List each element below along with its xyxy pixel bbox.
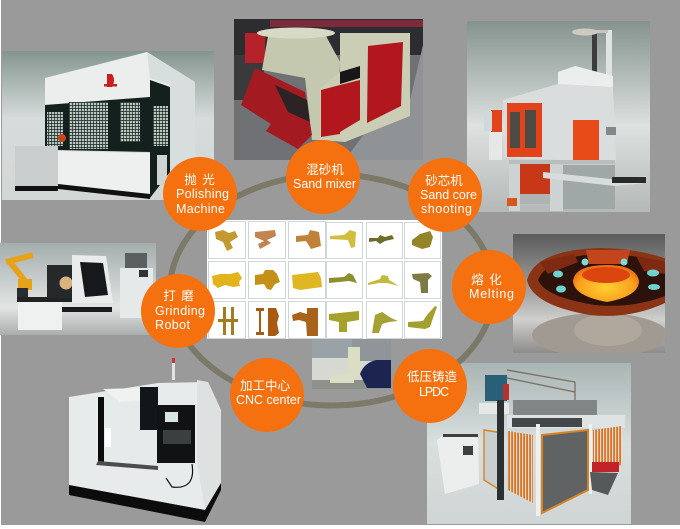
photo: polishing machine (2, 51, 214, 200)
grinding head (47, 265, 72, 298)
step: sand core shooting: 砂芯机 (425, 174, 463, 188)
base (509, 160, 615, 164)
step: grinding robot: Grinding (155, 304, 205, 318)
top beam (513, 400, 597, 415)
reflection (527, 248, 665, 353)
post and lamp (592, 30, 597, 82)
control box (15, 146, 58, 187)
process ring (170, 174, 494, 406)
step: polishing machine: Machine (176, 202, 225, 216)
red part rack (592, 462, 619, 472)
lower cabinet (58, 151, 150, 194)
photo: sand mixer (234, 19, 423, 160)
red chute (241, 68, 312, 149)
small hidden part photo under grid (312, 338, 391, 389)
step: polishing machine (163, 157, 237, 231)
step: sand mixer: Sand mixer (293, 177, 356, 191)
glowing casting (573, 265, 639, 302)
enclosure (72, 255, 113, 303)
step: CNC center: 加工中心 (240, 378, 290, 393)
opening (98, 389, 158, 466)
photo: sand core shooting machine (467, 21, 650, 212)
part row 3 (218, 306, 437, 336)
step: sand core shooting (408, 158, 482, 232)
logo (107, 74, 114, 87)
step: sand core shooting: shooting (421, 202, 472, 216)
step: grinding robot (141, 274, 215, 348)
photo: low pressure casting machine (427, 363, 631, 524)
step: sand mixer (286, 140, 360, 214)
control cabinet (125, 253, 147, 268)
step: CNC center (230, 358, 304, 432)
step: CNC center: CNC center (236, 393, 301, 407)
part row 1 (215, 230, 433, 251)
step: grinding robot: Robot (155, 318, 191, 332)
body (69, 382, 221, 510)
step: grinding robot: 打 磨 (163, 289, 195, 303)
mixer bowl (262, 36, 340, 140)
photo: CNC center (69, 358, 221, 522)
step: sand mixer: 混砂机 (306, 163, 344, 177)
step: LPDC: 低压铸造 (407, 369, 457, 384)
control panel (157, 405, 195, 463)
cabinet frame (320, 33, 410, 142)
step: polishing machine: Polishing (176, 187, 229, 201)
orange fencing (508, 431, 533, 503)
step: LPDC: LPDC (419, 385, 449, 399)
orange doors (507, 103, 542, 157)
photo: melting furnace (513, 234, 675, 357)
electric cabinet (437, 435, 479, 494)
parts grid (207, 220, 442, 339)
step: melting: 熔 化 (471, 272, 503, 287)
step: LPDC (393, 349, 467, 423)
step: sand core shooting: Sand core (420, 188, 477, 202)
window grids (69, 102, 108, 149)
top housing (558, 66, 613, 90)
signal tower (172, 358, 175, 380)
photo: grinding robot (0, 243, 156, 335)
robot arm (6, 255, 33, 285)
step: melting (452, 250, 526, 324)
dark window band (45, 80, 170, 198)
step: polishing machine: 抛 光 (184, 172, 216, 187)
part row 2 (212, 270, 432, 293)
step: melting: Melting (469, 287, 514, 301)
machine base (69, 483, 221, 522)
work bench (18, 302, 62, 330)
flames (553, 270, 563, 278)
spindle (140, 387, 158, 430)
white upper housing (45, 52, 195, 172)
furnace plate (527, 248, 675, 316)
